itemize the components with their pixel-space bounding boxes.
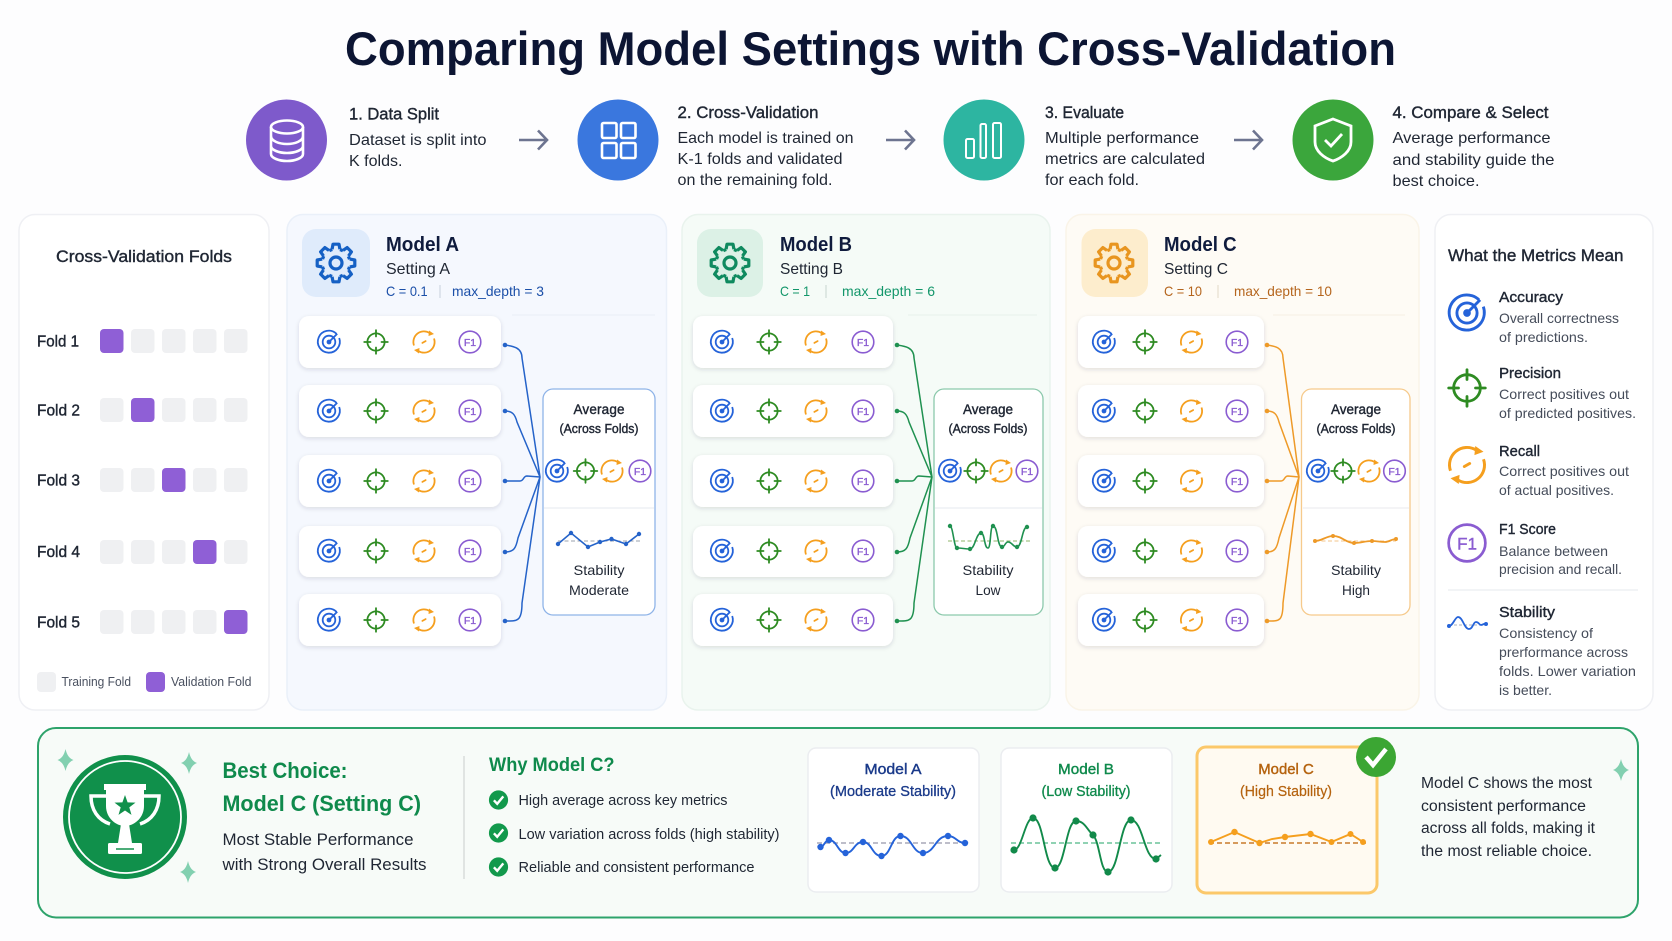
metric: stability: folds. Lower variation xyxy=(1499,663,1636,679)
arrow 3 xyxy=(1234,130,1262,150)
model A header xyxy=(386,234,544,299)
step 3 text: Multiple performance xyxy=(1045,130,1199,147)
metric: accuracy: of predictions. xyxy=(1499,329,1588,345)
step 2 text: on the remaining fold. xyxy=(678,172,832,189)
average box C xyxy=(1302,389,1410,615)
panel: best choice banner xyxy=(38,728,1638,918)
metric: recall: of actual positives. xyxy=(1499,482,1614,498)
sparkle left xyxy=(58,749,74,771)
metric: precision: of predicted positives. xyxy=(1499,405,1636,421)
arrow 2 xyxy=(886,130,914,150)
average box B: Stability xyxy=(962,562,1014,578)
step 2 text: 2. Cross-Validation xyxy=(678,103,818,122)
step 2: cross-validation xyxy=(578,100,854,189)
metric: accuracy: Accuracy xyxy=(1499,289,1564,306)
fold metric cards: F1 xyxy=(1231,476,1243,488)
model B icon: gear xyxy=(697,229,763,297)
metric: stability: Stability xyxy=(1499,604,1556,621)
fold metric cards: F1 xyxy=(857,337,869,349)
conclusion text: consistent performance xyxy=(1421,798,1586,815)
average box A: Stability xyxy=(574,562,624,578)
stability card: model C xyxy=(1197,747,1377,893)
best choice text: with Strong Overall Results xyxy=(222,855,426,874)
average box B: (Across Folds) xyxy=(948,421,1028,436)
model B header: Model B xyxy=(780,234,852,256)
fold metric cards: F1 xyxy=(857,406,869,418)
average box B: F1 xyxy=(1021,466,1033,478)
why model C list: Low variation across folds (high stability) xyxy=(518,827,780,843)
model C header: C = 10 xyxy=(1164,283,1202,299)
stability card: model A: Model A xyxy=(864,762,922,778)
panel: what the metrics mean xyxy=(1435,214,1653,710)
model C header: Model C xyxy=(1164,234,1237,256)
why model C list: High average across key metrics xyxy=(518,793,728,809)
fold metric cards: F1 xyxy=(464,406,476,418)
fold 4 row: Fold 4 xyxy=(37,544,80,561)
best choice text xyxy=(222,758,426,874)
fold metric cards: F1 xyxy=(1231,546,1243,558)
model C header: max_depth = 10 xyxy=(1234,283,1332,299)
step 3 text: metrics are calculated xyxy=(1045,151,1205,168)
arrow 1 xyxy=(519,130,547,150)
model C header: Setting C xyxy=(1164,261,1228,278)
metric: recall: Correct positives out xyxy=(1499,463,1629,479)
conclusion text: the most reliable choice. xyxy=(1421,843,1592,860)
step 1: data split xyxy=(246,100,487,180)
step 4: compare and select xyxy=(1292,100,1555,190)
metric: f1 score: Balance between xyxy=(1499,543,1608,559)
metric: stability xyxy=(1447,604,1636,698)
model A header: Setting A xyxy=(386,261,450,278)
fold 5 row: Fold 5 xyxy=(37,614,80,632)
stability card: model A xyxy=(808,748,979,892)
panel: model B xyxy=(682,214,1050,710)
fold 1 row: Fold 1 xyxy=(37,334,79,350)
fold 2 row: Fold 2 xyxy=(37,402,80,420)
average box A: (Across Folds) xyxy=(560,421,638,436)
panel: model C xyxy=(1066,214,1419,710)
model A icon: gear xyxy=(302,229,370,297)
average box C: F1 xyxy=(1388,466,1401,478)
step 4 text: best choice. xyxy=(1392,173,1480,190)
best choice text: Most Stable Performance xyxy=(222,830,414,849)
metric: precision: Precision xyxy=(1499,365,1561,382)
icon: grid xyxy=(578,100,658,180)
step 1 text: K folds. xyxy=(349,153,402,170)
stability card: model C: (High Stability) xyxy=(1240,784,1332,800)
step 4 text: Average performance xyxy=(1392,130,1551,147)
folds heading: Cross-Validation Folds xyxy=(56,247,232,266)
stability card: model B xyxy=(1001,748,1172,892)
fold metric cards xyxy=(1078,316,1264,646)
metric: stability: prerformance across xyxy=(1499,644,1628,660)
fold metric cards: F1 xyxy=(857,476,869,488)
metric: stability: is better. xyxy=(1499,682,1552,698)
step 2 text: K-1 folds and validated xyxy=(678,151,842,168)
conclusion text: Model C shows the most xyxy=(1421,775,1593,792)
best choice text: Model C (Setting C) xyxy=(222,791,421,816)
metric: precision xyxy=(1449,365,1636,421)
fold 3 row xyxy=(37,468,248,492)
step 2 text: Each model is trained on xyxy=(678,130,854,147)
metric: f1 score: F1 xyxy=(1457,534,1477,554)
average box A xyxy=(543,389,655,615)
fold 1 row xyxy=(37,329,248,353)
metric: precision: Correct positives out xyxy=(1499,386,1629,402)
fold metric cards: F1 xyxy=(464,476,476,488)
step 3 text: for each fold. xyxy=(1045,172,1139,189)
fold metric cards xyxy=(299,316,501,646)
fold metric cards: F1 xyxy=(1231,337,1243,349)
average box B xyxy=(934,389,1043,615)
panel: model A xyxy=(287,214,666,710)
fold metric cards: F1 xyxy=(464,546,476,558)
why model C list: Why Model C? xyxy=(489,755,614,776)
stability card: model C: Model C xyxy=(1258,762,1314,778)
model A header: Model A xyxy=(386,234,459,256)
model B header: Setting B xyxy=(780,261,843,278)
fold 5 row xyxy=(37,610,248,634)
metric: accuracy xyxy=(1449,289,1619,345)
icon: trophy badge xyxy=(63,755,187,879)
legend xyxy=(37,672,252,692)
average box C: Stability xyxy=(1331,562,1381,578)
model B header xyxy=(780,234,935,299)
metric: f1 score: F1 Score xyxy=(1499,521,1556,538)
why model C list: Reliable and consistent performance xyxy=(518,860,754,876)
metric: accuracy: Overall correctness xyxy=(1499,310,1619,326)
conclusion text: across all folds, making it xyxy=(1421,820,1596,837)
average box A: Average xyxy=(574,402,624,417)
step 4 text xyxy=(1392,103,1555,190)
fold metric cards: F1 xyxy=(1231,406,1243,418)
fold 4 row xyxy=(37,540,248,564)
metric: recall xyxy=(1449,443,1629,498)
average box C: (Across Folds) xyxy=(1316,421,1396,436)
model A header: max_depth = 3 xyxy=(452,283,544,299)
fold metric cards xyxy=(693,316,893,646)
stability card: model A: (Moderate Stability) xyxy=(830,784,956,800)
panel: cross-validation folds xyxy=(19,214,269,710)
fold metric cards: F1 xyxy=(857,546,869,558)
icon: shield xyxy=(1292,100,1374,180)
check badge xyxy=(1356,737,1396,777)
sparkle right xyxy=(1613,759,1629,781)
legend: Validation Fold xyxy=(171,675,252,689)
connectors B xyxy=(895,343,932,623)
step 4 text: 4. Compare & Select xyxy=(1392,103,1549,122)
fold metric cards: F1 xyxy=(857,615,869,627)
model B header: C = 1 xyxy=(780,283,810,299)
metric: f1 score xyxy=(1449,521,1622,577)
fold 2 row xyxy=(37,398,248,422)
model A header: C = 0.1 xyxy=(386,283,428,299)
average box B: Average xyxy=(963,402,1013,417)
model C header xyxy=(1164,234,1332,299)
metric: stability: Consistency of xyxy=(1499,625,1593,641)
stability card: model B: Model B xyxy=(1058,762,1114,778)
fold metric cards: F1 xyxy=(464,615,476,627)
average box C: Average xyxy=(1331,402,1381,417)
step 1 text xyxy=(349,104,487,170)
metric: f1 score: precision and recall. xyxy=(1499,561,1622,577)
sparkle top xyxy=(181,752,197,774)
step 3: evaluate xyxy=(944,100,1205,189)
legend: Training Fold xyxy=(62,675,131,689)
icon: bars xyxy=(944,100,1024,180)
stability card: model B: (Low Stability) xyxy=(1042,784,1130,800)
step 2 text xyxy=(678,103,854,189)
metrics heading: What the Metrics Mean xyxy=(1448,246,1624,265)
fold 3 row: Fold 3 xyxy=(37,472,80,490)
average box C: High xyxy=(1342,582,1370,598)
average box B: Low xyxy=(976,582,1001,598)
step 1 text: 1. Data Split xyxy=(349,104,439,124)
conclusion text xyxy=(1421,775,1596,860)
metric: recall: Recall xyxy=(1499,443,1540,460)
title: Comparing Model Settings with Cross-Validation xyxy=(345,22,1396,75)
average box A: F1 xyxy=(634,466,646,478)
sparkle bottom xyxy=(180,861,196,883)
best choice text: Best Choice: xyxy=(222,758,348,783)
average box A: Moderate xyxy=(569,582,629,598)
why model C list xyxy=(489,755,780,877)
step 3 text xyxy=(1045,103,1205,189)
connectors A xyxy=(503,343,540,623)
model B header: max_depth = 6 xyxy=(842,283,935,299)
icon: database xyxy=(246,100,327,180)
fold metric cards: F1 xyxy=(464,337,476,349)
step 4 text: and stability guide the xyxy=(1392,152,1555,169)
connectors C xyxy=(1265,343,1299,623)
fold metric cards: F1 xyxy=(1231,615,1243,627)
step 1 text: Dataset is split into xyxy=(349,132,487,149)
model C icon: gear xyxy=(1082,229,1148,297)
step 3 text: 3. Evaluate xyxy=(1045,103,1124,122)
